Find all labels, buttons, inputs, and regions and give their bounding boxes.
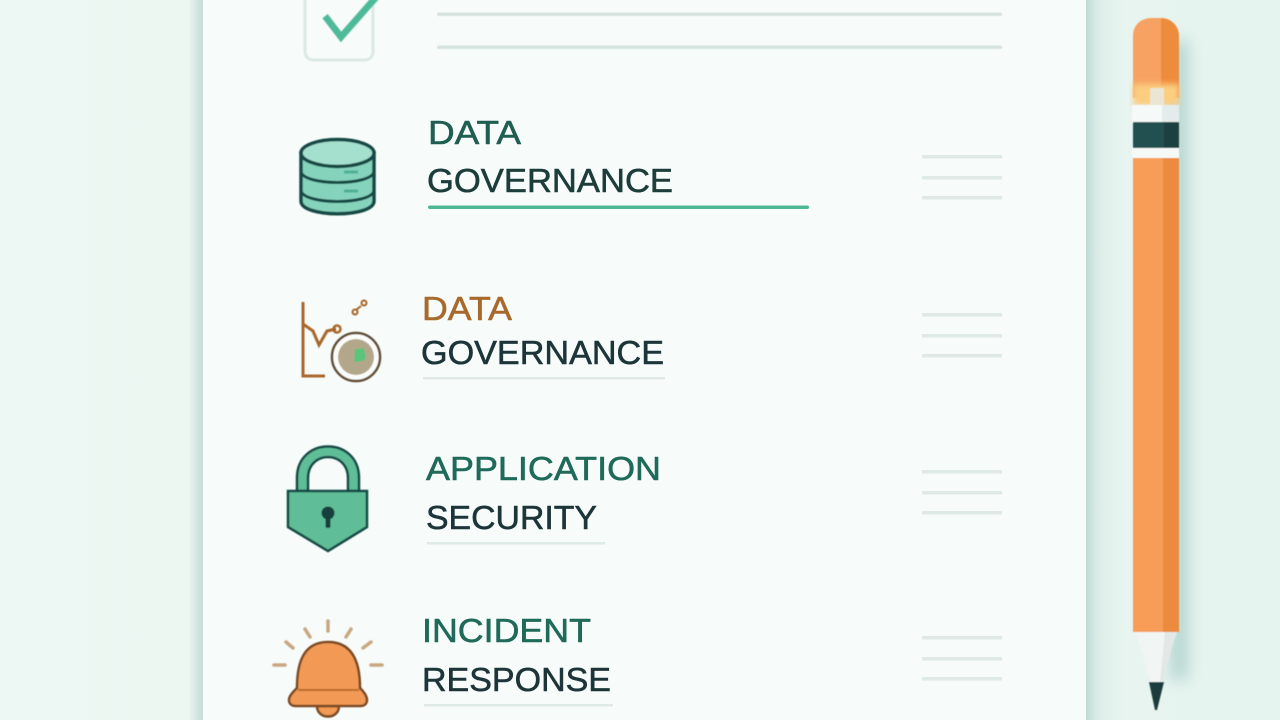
- icon: alarm bell: [274, 621, 382, 716]
- icon: checkbox with tick: [305, 0, 377, 60]
- heading: APPLICATION SECURITY: APPLICATION: [426, 450, 661, 487]
- heading: INCIDENT RESPONSE: INCIDENT: [422, 612, 591, 649]
- heading: APPLICATION SECURITY: SECURITY: [426, 499, 597, 536]
- row: data governance 2: [303, 290, 1002, 381]
- icon: database: [301, 140, 374, 214]
- underline: [424, 704, 613, 706]
- side lines: [922, 313, 1002, 358]
- heading: DATA GOVERNANCE: [427, 114, 673, 199]
- row: application security: [288, 446, 1002, 551]
- icon: padlock: [288, 446, 367, 551]
- icon: chart and coin: [303, 300, 380, 381]
- side lines: [922, 470, 1002, 514]
- heading: DATA GOVERNANCE: DATA: [422, 290, 512, 327]
- side lines: [922, 155, 1002, 200]
- heading: INCIDENT RESPONSE: [422, 612, 611, 698]
- panel: checklist paper: [203, 0, 1086, 720]
- heading: DATA GOVERNANCE: GOVERNANCE: [427, 162, 673, 199]
- accent underline: [428, 206, 809, 209]
- heading: DATA GOVERNANCE: GOVERNANCE: [421, 334, 664, 371]
- heading: DATA GOVERNANCE: [421, 290, 664, 371]
- top text placeholder lines: [437, 12, 1002, 49]
- underline: [427, 542, 605, 544]
- heading: DATA GOVERNANCE: DATA: [428, 114, 521, 151]
- side lines: [922, 636, 1002, 680]
- row: data governance 1: [301, 114, 1002, 214]
- pencil: [1132, 18, 1188, 710]
- underline: [423, 377, 665, 380]
- top checklist row: [305, 0, 1002, 60]
- heading: APPLICATION SECURITY: [426, 450, 661, 536]
- heading: INCIDENT RESPONSE: RESPONSE: [422, 661, 611, 698]
- row: incident response: [274, 612, 1002, 716]
